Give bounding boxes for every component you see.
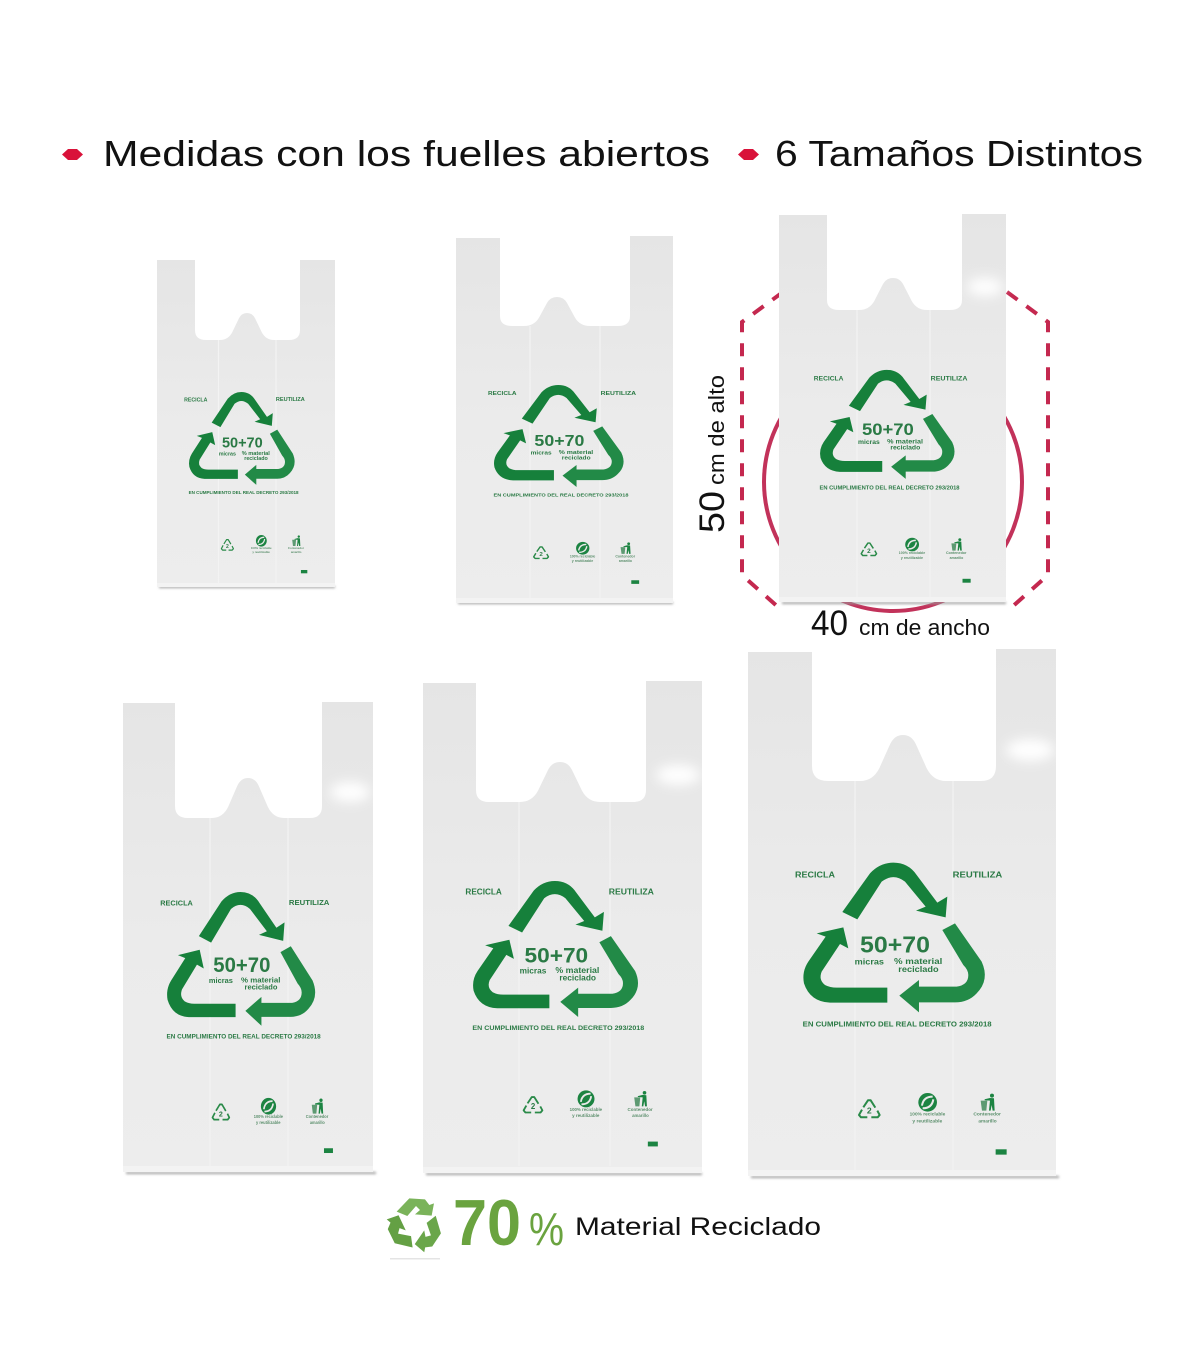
bag 5 print — [465, 881, 658, 1146]
bag 3 with measurements — [779, 214, 1006, 604]
percent sign: % — [529, 1203, 564, 1255]
width label — [811, 604, 990, 643]
height label: cm de alto — [704, 375, 729, 485]
bag 3 shadow — [782, 602, 1006, 604]
red measurement circle — [764, 353, 1022, 611]
bag 6 gusset — [855, 781, 953, 1170]
bag 2 print: Contenedor — [615, 554, 636, 558]
bag 2 print: REUTILIZA — [601, 391, 637, 397]
bag 5 — [423, 681, 702, 1175]
bag 1 print: REUTILIZA — [276, 397, 305, 403]
bag 2 print: RECICLA — [488, 391, 517, 397]
bag 3 gusset — [857, 310, 930, 598]
bag 5 print: amarillo — [632, 1113, 649, 1118]
bag 4 — [123, 702, 376, 1174]
bag 1 print: 50+70 — [222, 434, 263, 451]
bag 3 hem — [779, 597, 1006, 602]
bag 2 print: micras — [531, 451, 552, 456]
bag 3 print: RECICLA — [814, 376, 844, 383]
bag 5 print: 50+70 — [525, 945, 588, 968]
bullet — [62, 149, 83, 160]
bag 2 shadow — [458, 602, 673, 604]
bag 2 print: 2 — [539, 552, 543, 558]
bag 4 print — [160, 892, 333, 1153]
height label — [693, 375, 732, 533]
bag 5 print: Contenedor — [628, 1107, 653, 1112]
bag 3 print: micras — [858, 439, 880, 446]
bag 2 print: 50+70 — [534, 432, 584, 450]
bag 6 print: 2 — [867, 1106, 872, 1116]
bag 6 print: 100% reciclable — [910, 1112, 946, 1118]
title: medidas con los fuelles abiertos — [62, 133, 710, 174]
heading text: 6 Tamaños Distintos — [775, 133, 1143, 174]
bag 4 print: % material — [241, 975, 280, 985]
bag 3 print: 2 — [867, 548, 871, 555]
bag 3 print: y reutilizable — [901, 556, 923, 560]
bag 2 body — [456, 236, 673, 603]
bag 2 print: reciclado — [562, 456, 591, 461]
bag 4 print: amarillo — [310, 1120, 325, 1125]
bag 6 print: Contenedor — [973, 1112, 1001, 1118]
bag 1 print: EN CUMPLIMIENTO DEL REAL DECRETO 293/2018 — [189, 490, 299, 495]
bag 3 print: reciclado — [890, 445, 920, 452]
bag 1 print: amarillo — [291, 550, 302, 554]
bag 1 print: reciclado — [244, 456, 268, 462]
bag 1 — [157, 260, 335, 588]
bag 4 print: RECICLA — [160, 898, 194, 907]
bag 2 print — [488, 385, 639, 584]
bag 4 hem — [123, 1166, 373, 1172]
heading text: Medidas con los fuelles abiertos — [103, 133, 710, 174]
bag 3 print: 50+70 — [862, 419, 914, 439]
bag 1 print: micras — [219, 451, 236, 457]
bag 3 print: Contenedor — [946, 551, 967, 555]
bag 6 print: % material — [894, 956, 942, 966]
dashed measure: right — [1007, 292, 1048, 607]
bag 1 print: 100% reciclable — [251, 546, 272, 550]
bag 1 print: RECICLA — [184, 397, 208, 403]
bag 2 print: EN CUMPLIMIENTO DEL REAL DECRETO 293/2018 — [493, 493, 629, 499]
bag 4 body — [123, 702, 373, 1172]
bag 3 print: % material — [887, 439, 923, 446]
bag 6 print: EN CUMPLIMIENTO DEL REAL DECRETO 293/2018 — [803, 1020, 992, 1029]
bag 6 print — [795, 863, 1007, 1155]
70 figure: 70 — [453, 1186, 521, 1259]
bag 6 print: amarillo — [978, 1118, 997, 1124]
bag 4 print: REUTILIZA — [289, 898, 330, 907]
bag 6 print: RECICLA — [795, 870, 836, 880]
bag 5 print: EN CUMPLIMIENTO DEL REAL DECRETO 293/2018 — [472, 1025, 645, 1032]
bag 1 print: 2 — [226, 544, 229, 550]
title: 6 tamaños distintos — [738, 133, 1143, 174]
bag 6 print: 50+70 — [860, 931, 930, 957]
bag 2 print: y reutilizable — [572, 559, 593, 563]
recycled material badge — [382, 1186, 821, 1259]
bag 4 print: Contenedor — [306, 1114, 329, 1119]
bag 5 print: 100% reciclable — [570, 1107, 603, 1112]
bag 5 print: y reutilizable — [572, 1113, 600, 1118]
bag 4 print: y reutilizable — [256, 1120, 281, 1125]
bag 1 print: % material — [242, 451, 270, 457]
width label: cm de ancho — [859, 615, 990, 640]
bag 6 shadow — [751, 1176, 1059, 1178]
bag 6 print: micras — [855, 957, 884, 967]
bag 2 — [456, 236, 673, 604]
bag 1 hem — [157, 583, 335, 587]
bag 3 body — [779, 214, 1006, 602]
bag 1 gusset — [218, 340, 276, 583]
bag 5 print: 2 — [531, 1102, 536, 1111]
bag 3 print: REUTILIZA — [931, 376, 968, 382]
bag 2 hem — [456, 598, 673, 603]
badge label: Material Reciclado — [575, 1213, 821, 1241]
height label: 50 — [693, 491, 732, 533]
bag 4 print: 2 — [219, 1109, 223, 1118]
icon: recycling arrows — [382, 1198, 447, 1255]
bag 5 hem — [423, 1167, 702, 1173]
bag 3 print: 100% reciclable — [899, 551, 925, 555]
bag 2 print: 100% reciclable — [570, 554, 595, 558]
bag 4 shadow — [126, 1172, 376, 1174]
bullet — [738, 149, 759, 160]
bag 1 body — [157, 260, 335, 587]
bag 4 print: 100% reciclable — [254, 1114, 283, 1119]
bag 4 print: micras — [209, 976, 233, 985]
bag 6 print: REUTILIZA — [953, 869, 1003, 879]
bag 2 gusset — [530, 326, 600, 599]
bag 5 print: % material — [555, 966, 599, 975]
bag 6 print: y reutilizable — [912, 1118, 943, 1124]
bag 6 hem — [748, 1170, 1056, 1176]
bag 6 body — [748, 649, 1056, 1176]
bag 5 body — [423, 681, 702, 1173]
bag 3 print — [814, 370, 971, 583]
bag 5 shadow — [426, 1173, 702, 1175]
bag 4 print: EN CUMPLIMIENTO DEL REAL DECRETO 293/2018 — [166, 1033, 321, 1041]
bag 5 gusset — [519, 802, 610, 1166]
bag 3 print: EN CUMPLIMIENTO DEL REAL DECRETO 293/2018 — [819, 485, 960, 491]
bag 1 print — [184, 392, 307, 573]
bag 2 print: % material — [559, 450, 594, 456]
bag 3 print: amarillo — [950, 556, 964, 560]
bag 5 print: reciclado — [559, 973, 596, 982]
bag 4 gusset — [210, 818, 288, 1166]
bag 6 — [748, 649, 1059, 1178]
bag 5 print: micras — [520, 967, 547, 976]
bag 5 print: RECICLA — [465, 888, 502, 897]
bag 5 print: REUTILIZA — [609, 887, 654, 896]
bag 2 print: amarillo — [619, 559, 632, 563]
bag 1 shadow — [159, 586, 335, 588]
bag 6 print: reciclado — [898, 964, 939, 974]
bag 4 print: 50+70 — [213, 954, 270, 977]
dashed measure: left — [742, 292, 783, 607]
bag 1 print: Contenedor — [288, 546, 305, 550]
bag 4 print: reciclado — [245, 982, 278, 992]
width label: 40 — [811, 604, 848, 643]
bag 1 print: y reutilizable — [252, 550, 270, 554]
